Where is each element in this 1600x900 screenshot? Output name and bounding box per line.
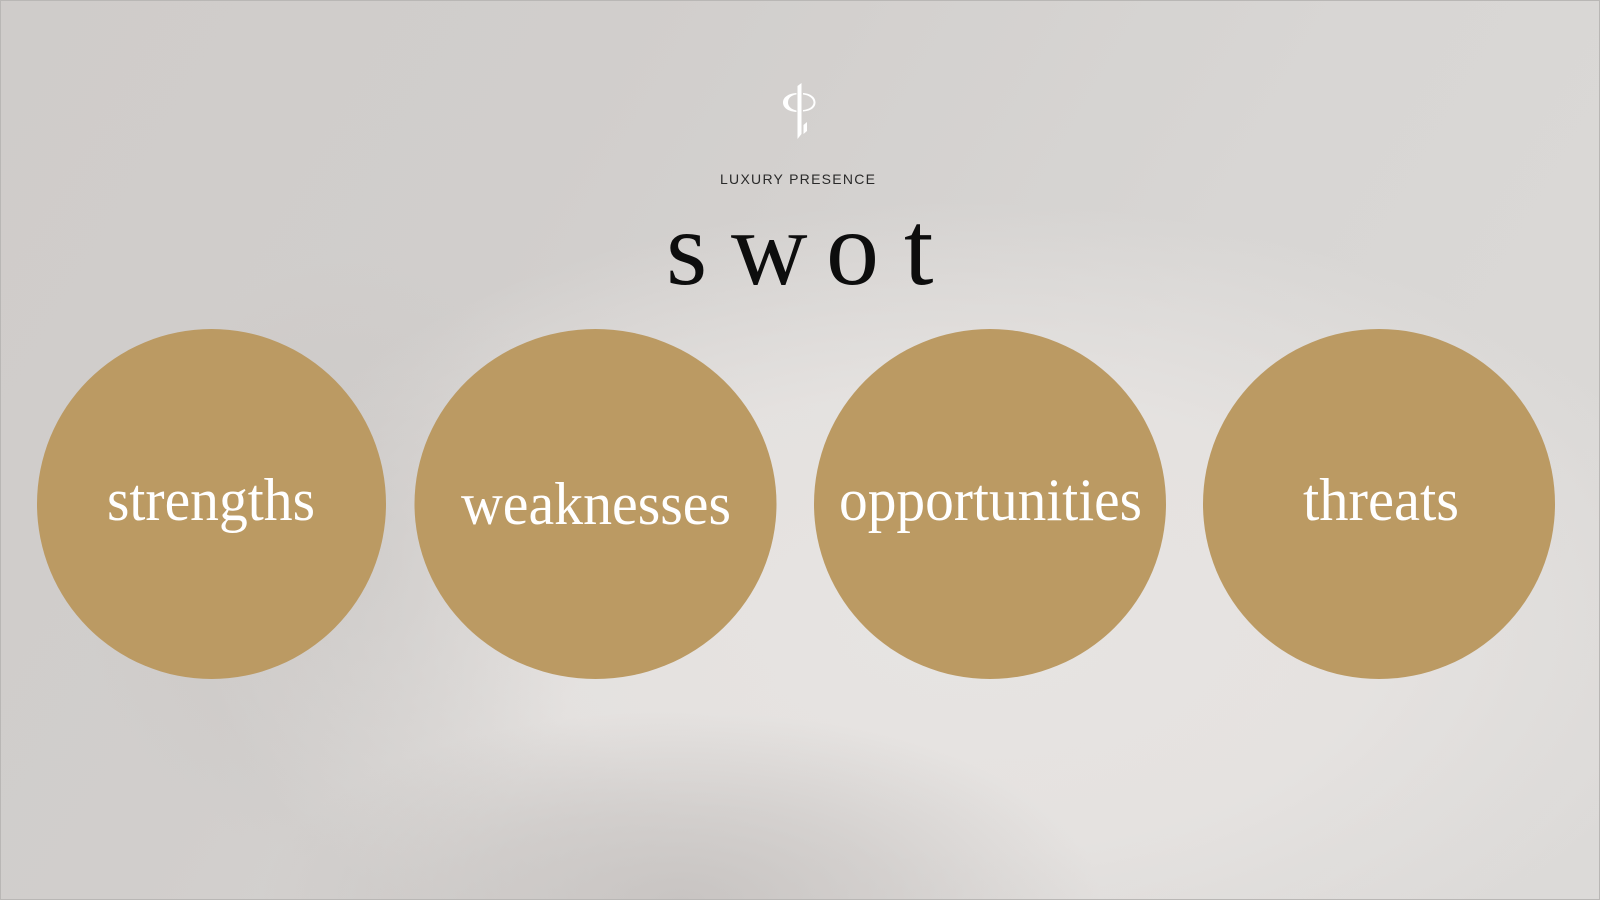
brand name: LUXURY PRESENCE bbox=[720, 171, 875, 187]
panel: threats bbox=[1203, 329, 1555, 679]
panel: opportunities: opportunities bbox=[839, 467, 1142, 533]
panel: weaknesses bbox=[414, 329, 776, 679]
panel: opportunities bbox=[814, 329, 1166, 679]
panel: strengths: strengths bbox=[107, 467, 315, 533]
title: swot bbox=[666, 190, 933, 307]
icon: key logo bbox=[783, 83, 816, 139]
panel: strengths bbox=[37, 329, 386, 679]
panel: weaknesses: weaknesses bbox=[461, 471, 731, 537]
panel: threats: threats bbox=[1303, 467, 1459, 533]
